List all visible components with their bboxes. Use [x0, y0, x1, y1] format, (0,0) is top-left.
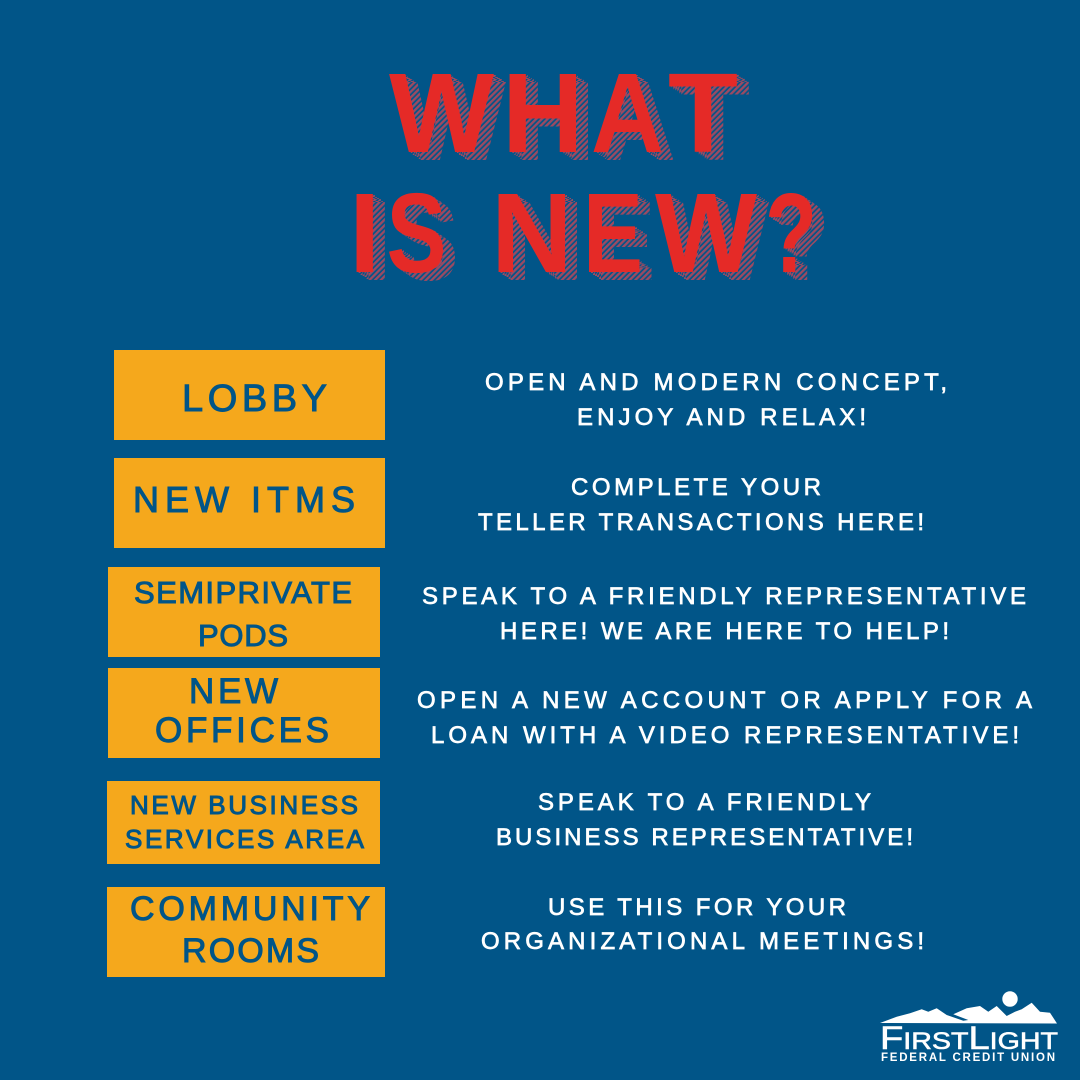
row: community rooms: [107, 887, 924, 977]
row: new itms: [114, 458, 924, 548]
label: new business services area: SERVICES AREA: [125, 824, 365, 854]
description: new offices: LOAN WITH A VIDEO REPRESENTATIVE!: [431, 722, 1019, 749]
label: new business services area: [107, 781, 380, 864]
label: semiprivate pods: [108, 567, 380, 657]
description: semiprivate pods: SPEAK TO A FRIENDLY REPRESENTATIVE: [422, 583, 1026, 610]
label: community rooms: ROOMS: [182, 932, 319, 970]
description: new itms: COMPLETE YOUR: [571, 474, 821, 501]
label: community rooms: [107, 887, 385, 977]
description: community rooms: ORGANIZATIONAL MEETINGS!: [481, 928, 924, 955]
row: lobby: [114, 350, 947, 440]
label: lobby: [114, 350, 385, 440]
label: semiprivate pods: SEMIPRIVATE: [134, 575, 352, 610]
description: new itms: TELLER TRANSACTIONS HERE!: [478, 509, 924, 536]
row: new business services area: [107, 781, 913, 864]
description: new itms: [478, 474, 924, 536]
icon: mountains: [880, 1003, 1057, 1024]
description: community rooms: USE THIS FOR YOUR: [548, 894, 846, 921]
description: new offices: [417, 687, 1032, 749]
label: new offices: [108, 668, 380, 758]
label: new itms: NEW ITMS: [133, 479, 355, 520]
description: new business services area: [496, 789, 913, 851]
title: [349, 50, 829, 304]
logo wordmark: FIRST LIGHT: [880, 1020, 1058, 1056]
label: new offices: NEW: [189, 672, 278, 711]
label: new offices: OFFICES: [155, 711, 329, 750]
label: new business services area: NEW BUSINESS: [130, 790, 358, 820]
logo: FirstLight Federal Credit Union: [880, 991, 1058, 1064]
label: new itms: [114, 458, 385, 548]
description: community rooms: [481, 894, 924, 955]
title hatched shadow: [351, 51, 829, 304]
row: semiprivate pods: [108, 567, 1026, 657]
label: lobby: LOBBY: [182, 378, 327, 420]
row: new offices: [108, 668, 1032, 758]
description: new offices: OPEN A NEW ACCOUNT OR APPLY FOR A: [417, 687, 1032, 714]
description: lobby: [485, 369, 947, 431]
title red text: [349, 50, 817, 296]
description: semiprivate pods: HERE! WE ARE HERE TO HELP!: [500, 618, 949, 645]
logo tagline: FEDERAL CREDIT UNION: [881, 1052, 1055, 1064]
description: new business services area: BUSINESS REPRESENTATIVE!: [496, 824, 913, 851]
description: lobby: OPEN AND MODERN CONCEPT,: [485, 369, 947, 396]
label: semiprivate pods: PODS: [198, 618, 288, 653]
description: lobby: ENJOY AND RELAX!: [577, 404, 866, 431]
icon: sun: [1002, 991, 1018, 1007]
label: community rooms: COMMUNITY: [130, 890, 370, 928]
description: semiprivate pods: [422, 583, 1026, 645]
description: new business services area: SPEAK TO A FRIENDLY: [538, 789, 871, 816]
